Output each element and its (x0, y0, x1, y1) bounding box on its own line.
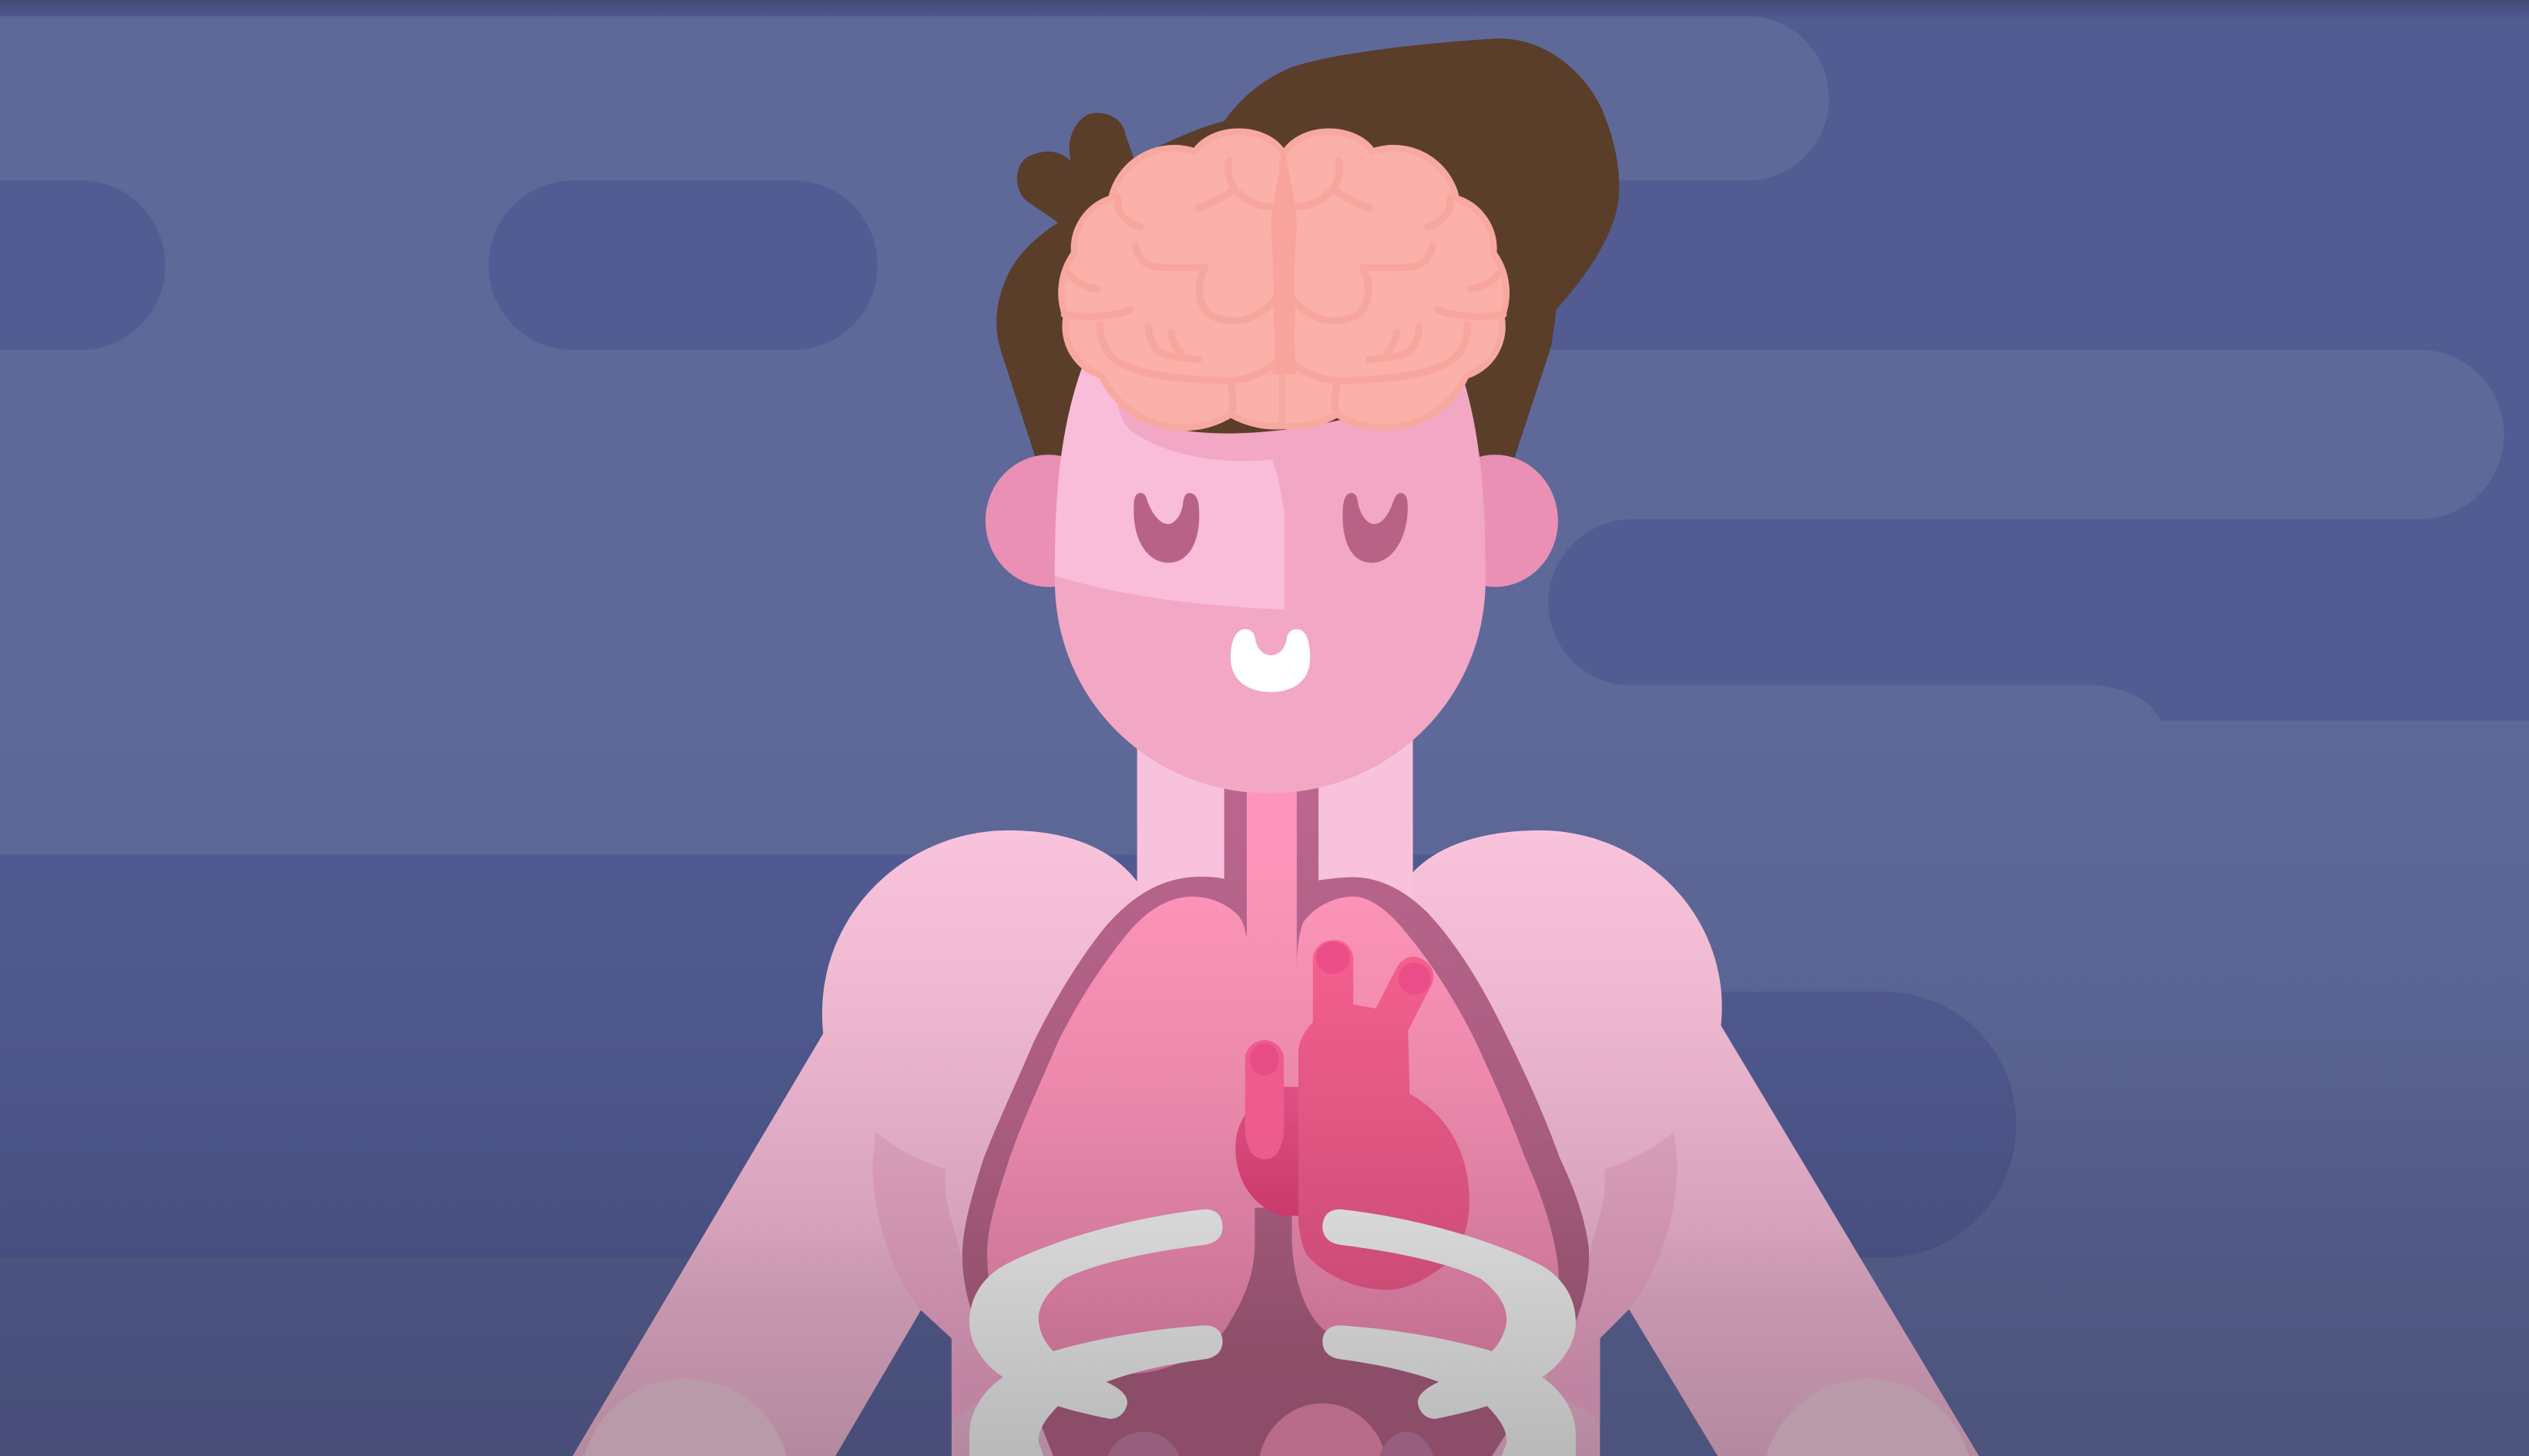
organ: right (1379, 1432, 1433, 1456)
arm joint: left (584, 1379, 787, 1456)
mouth (1231, 629, 1310, 692)
hair (996, 39, 1619, 468)
brain: right hemisphere (1282, 132, 1506, 428)
vessel opening: top (1316, 941, 1350, 974)
torso and shoulders (822, 830, 1722, 1456)
hair fringe under brain (1174, 379, 1358, 434)
ribs: left (969, 1209, 1223, 1456)
arm joint: right (1767, 1379, 1969, 1456)
vessel opening: right (1399, 963, 1431, 995)
vessel opening: left (1250, 1043, 1279, 1075)
ear: left (986, 455, 1111, 587)
brain: central fissure (1271, 153, 1297, 374)
brain (1061, 132, 1506, 428)
trachea (1247, 750, 1297, 977)
organ: centre (1260, 1404, 1385, 1456)
heart (1235, 940, 1469, 1290)
heart: left vessel (1245, 1040, 1284, 1159)
pectoral shading: left (872, 1132, 1008, 1419)
arm: right (1580, 1025, 1979, 1456)
eye: left (1134, 493, 1199, 562)
heart: main body (1298, 940, 1469, 1290)
heart: right chamber (1235, 1087, 1300, 1216)
ear: right (1432, 455, 1558, 587)
neck (1137, 726, 1413, 903)
pectoral shading: right (1542, 1132, 1678, 1419)
ribs: right (1322, 1209, 1576, 1456)
abdominal organs (1107, 1404, 1433, 1456)
eye: right (1342, 493, 1408, 562)
chest cavity and lung outline (962, 758, 1589, 1456)
lungs (987, 897, 1559, 1374)
arm: left (573, 1034, 968, 1456)
organ: left (1107, 1431, 1180, 1456)
forehead highlight (1055, 363, 1285, 609)
brain: left hemisphere (1061, 132, 1285, 428)
face (1055, 363, 1486, 793)
